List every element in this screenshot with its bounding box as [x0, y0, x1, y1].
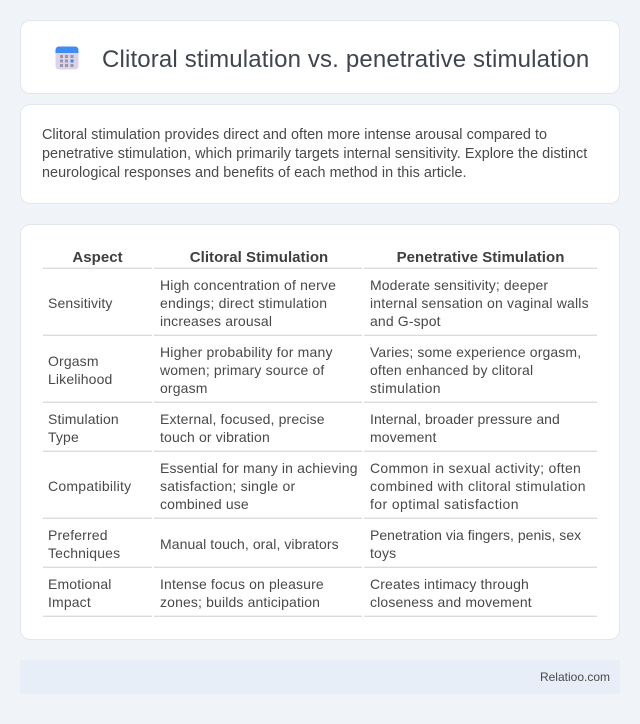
row: Emotional Impact — [48, 576, 532, 610]
row: Stimulation Type: movement — [370, 429, 436, 445]
row: Sensitivity: increases arousal — [160, 313, 272, 329]
row: Compatibility: Essential for many in achieving — [160, 460, 358, 476]
row: Emotional Impact: zones; builds anticipation — [160, 594, 320, 610]
row: Orgasm Likelihood — [48, 344, 581, 396]
row: Orgasm Likelihood: often enhanced by clitoral — [370, 362, 533, 378]
row: Stimulation Type: External, focused, precise — [160, 411, 325, 427]
text block: introduction — [42, 127, 588, 181]
heading: Penetrative Stimulation: Penetrative Stimulation — [397, 249, 564, 266]
heading: Aspect: Aspect — [72, 249, 123, 266]
row: Sensitivity: endings; direct stimulation — [160, 295, 327, 311]
row: Preferred Techniques: Manual touch, oral, vibrators — [160, 536, 339, 552]
row: Emotional Impact: Impact — [48, 594, 91, 610]
row: Compatibility: Compatibility — [48, 478, 131, 494]
row: Emotional Impact: closeness and movement — [370, 594, 532, 610]
row: Orgasm Likelihood: Varies; some experience orgasm, — [370, 344, 581, 360]
row: Sensitivity: and G-spot — [370, 313, 441, 329]
row: Orgasm Likelihood: Higher probability for many — [160, 344, 333, 360]
row: Compatibility: combined with clitoral stimulation — [370, 478, 586, 494]
row: Compatibility: satisfaction; single or — [160, 478, 295, 494]
row: Preferred Techniques: toys — [370, 545, 396, 561]
row: Compatibility: Common in sexual activity; often — [370, 460, 581, 476]
row: Orgasm Likelihood: Likelihood — [48, 371, 112, 387]
icon: calendar — [56, 46, 78, 70]
row: Emotional Impact: Creates intimacy through — [370, 576, 529, 592]
row: Stimulation Type: Internal, broader pressure and — [370, 411, 560, 427]
footer: Relatioo.com: Relatioo.com — [540, 670, 610, 684]
panel: title card — [20, 20, 620, 94]
row: Stimulation Type: Type — [48, 429, 79, 445]
panel: introduction card — [20, 104, 620, 204]
row: Preferred Techniques — [48, 527, 581, 561]
row: Sensitivity: Sensitivity — [48, 295, 113, 311]
text block: introduction: neurological responses and benefits of each method in this article. — [42, 165, 467, 181]
row: Preferred Techniques: Penetration via fingers, penis, sex — [370, 527, 581, 543]
heading: Clitoral Stimulation: Clitoral Stimulation — [190, 249, 328, 266]
text block: introduction: Clitoral stimulation provides direct and often more intense arousal compared to — [42, 127, 547, 143]
text block: introduction: penetrative stimulation, which primarily targets internal sensitivity. Explore the distinct — [42, 146, 587, 162]
panel: comparison table card — [20, 224, 620, 640]
row: Stimulation Type: touch or vibration — [160, 429, 270, 445]
footer bar — [20, 660, 620, 694]
row: Stimulation Type — [48, 411, 560, 445]
row: Compatibility — [48, 460, 586, 512]
row: Compatibility: combined use — [160, 496, 249, 512]
row: Preferred Techniques: Preferred — [48, 527, 108, 543]
row: Emotional Impact: Intense focus on pleasure — [160, 576, 324, 592]
row: Orgasm Likelihood: Orgasm — [48, 353, 99, 369]
row: Orgasm Likelihood: orgasm — [160, 380, 208, 396]
row: Orgasm Likelihood: stimulation — [370, 380, 441, 396]
row: Orgasm Likelihood: women; primary source of — [160, 362, 324, 378]
row: Sensitivity: internal sensation on vaginal walls — [370, 295, 589, 311]
row: Compatibility: for optimal satisfaction — [370, 496, 519, 512]
row: Preferred Techniques: Techniques — [48, 545, 120, 561]
row: Stimulation Type: Stimulation — [48, 411, 119, 427]
row: Sensitivity: High concentration of nerve — [160, 277, 336, 293]
row: Sensitivity: Moderate sensitivity; deeper — [370, 277, 548, 293]
row: Sensitivity — [48, 277, 589, 329]
row: Emotional Impact: Emotional — [48, 576, 112, 592]
title: Clitoral stimulation vs. penetrative stimulation — [102, 46, 589, 73]
